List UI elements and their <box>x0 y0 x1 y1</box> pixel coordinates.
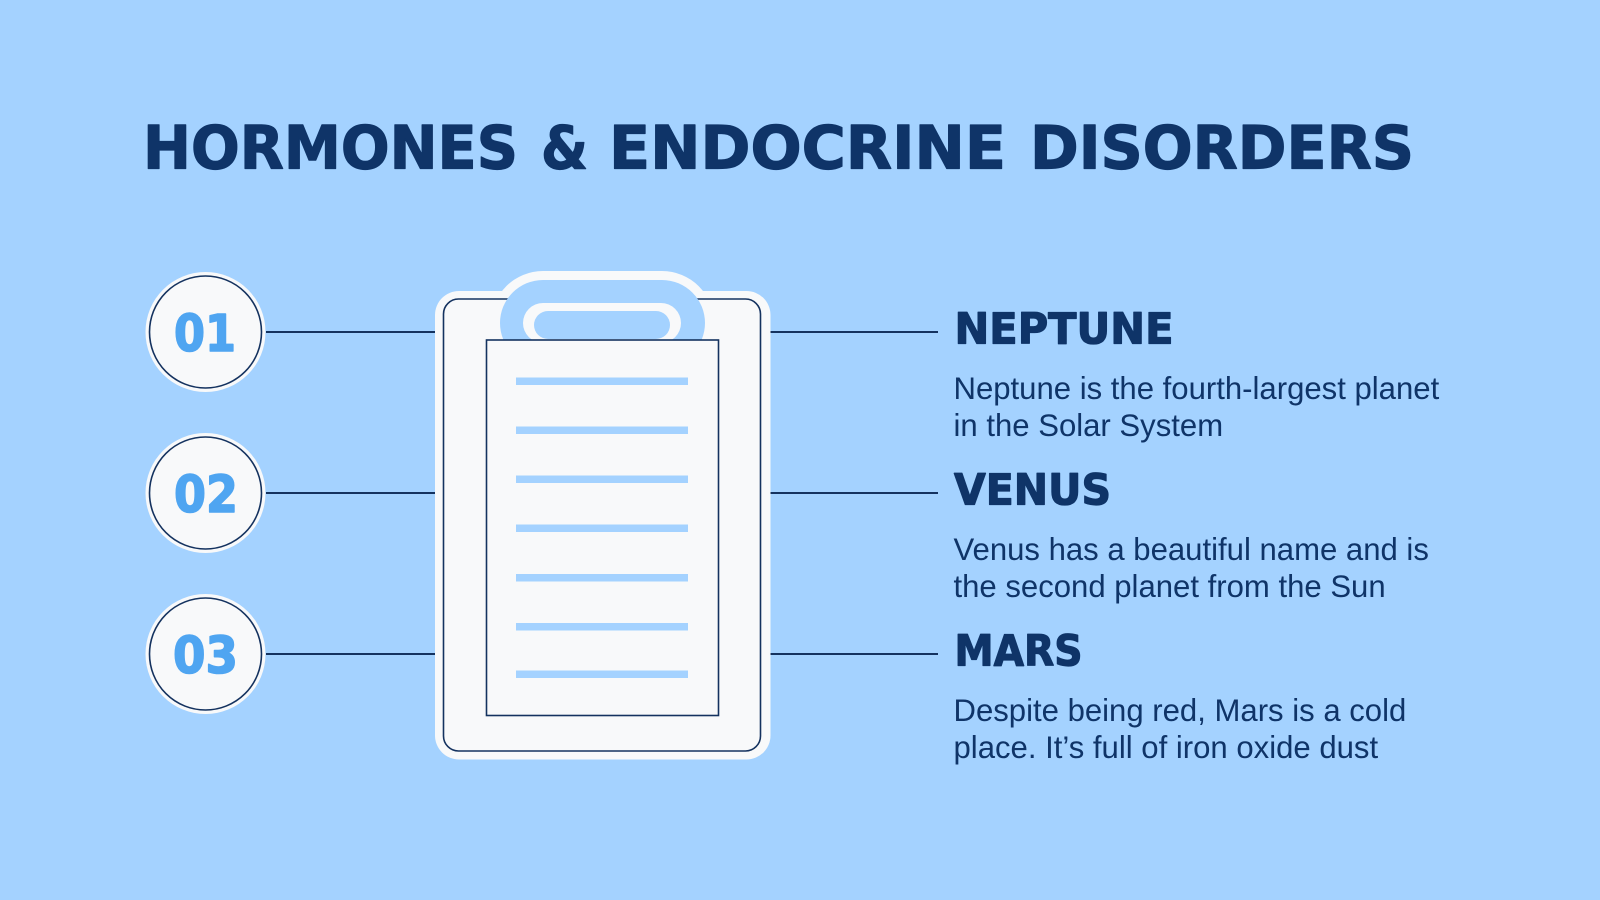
badge 01 <box>146 272 266 392</box>
text block: Neptune: NEPTUNE <box>954 304 1174 354</box>
text block: Venus: VENUS <box>954 466 1111 516</box>
title: & <box>541 114 588 184</box>
clipboard white outline <box>435 291 770 760</box>
title: DISORDERS <box>1030 114 1414 184</box>
paper <box>486 340 718 716</box>
paper lines <box>516 378 688 678</box>
badge 03 <box>146 594 266 714</box>
badge 01: 01 <box>174 305 236 364</box>
text block: Mars: MARS <box>954 626 1082 676</box>
text block: Neptune: in the Solar System <box>954 408 1223 443</box>
icon: clipboard <box>435 271 770 760</box>
title: HORMONES <box>143 114 518 184</box>
clipboard board <box>444 299 760 751</box>
text block: Mars: place. It’s full of iron oxide dust <box>954 730 1378 765</box>
text block: Venus: the second planet from the Sun <box>954 569 1386 604</box>
text block: Venus <box>954 466 1429 604</box>
badge 03: 03 <box>173 627 238 686</box>
text block: Mars <box>954 626 1406 765</box>
clip hole <box>534 311 670 339</box>
badge 02: 02 <box>174 466 238 525</box>
title: ENDOCRINE <box>609 114 1006 184</box>
clip ring <box>523 303 681 343</box>
text block: Neptune <box>954 304 1440 443</box>
clip white outline <box>491 271 714 375</box>
title <box>143 114 1414 184</box>
text block: Mars: Despite being red, Mars is a cold <box>954 693 1406 728</box>
clip <box>500 280 705 366</box>
connector lines <box>266 332 938 654</box>
badge 02 <box>146 433 266 553</box>
text block: Neptune: Neptune is the fourth-largest planet <box>954 371 1440 406</box>
text block: Venus: Venus has a beautiful name and is <box>954 532 1429 567</box>
